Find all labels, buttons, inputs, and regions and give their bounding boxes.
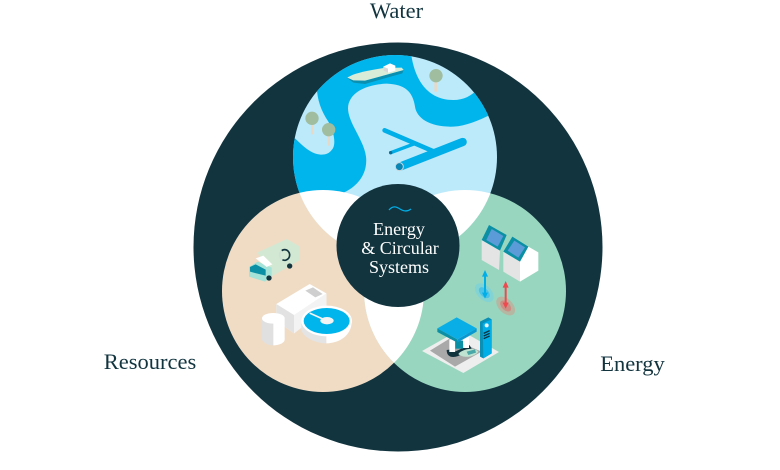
overlap: water and energy — [433, 190, 490, 236]
icon: solar houses — [482, 225, 538, 282]
panel: energy circle — [364, 190, 566, 392]
panel: resources circle — [222, 190, 424, 392]
icon: water pipes — [385, 130, 463, 171]
icon: truck — [249, 239, 300, 282]
icon: trees — [305, 69, 443, 146]
icon: wave — [389, 207, 411, 211]
center title — [361, 219, 439, 277]
center title: Systems — [369, 257, 429, 277]
icon: ship — [347, 63, 404, 84]
heading: Energy: Energy — [600, 351, 666, 376]
outer dark circle — [194, 42, 602, 452]
center title: Energy — [373, 219, 425, 239]
overlap: resources and energy — [364, 297, 424, 363]
icon: recycling plant — [262, 284, 352, 345]
panel: water circle — [293, 55, 497, 259]
river — [293, 55, 488, 194]
icon: energy exchange arrows — [471, 270, 519, 319]
icon: charging station — [422, 317, 499, 373]
center circle — [336, 184, 460, 307]
center title: & Circular — [361, 238, 439, 258]
heading: Resources: Resources — [104, 349, 196, 374]
overlap: water and resources — [300, 190, 360, 240]
